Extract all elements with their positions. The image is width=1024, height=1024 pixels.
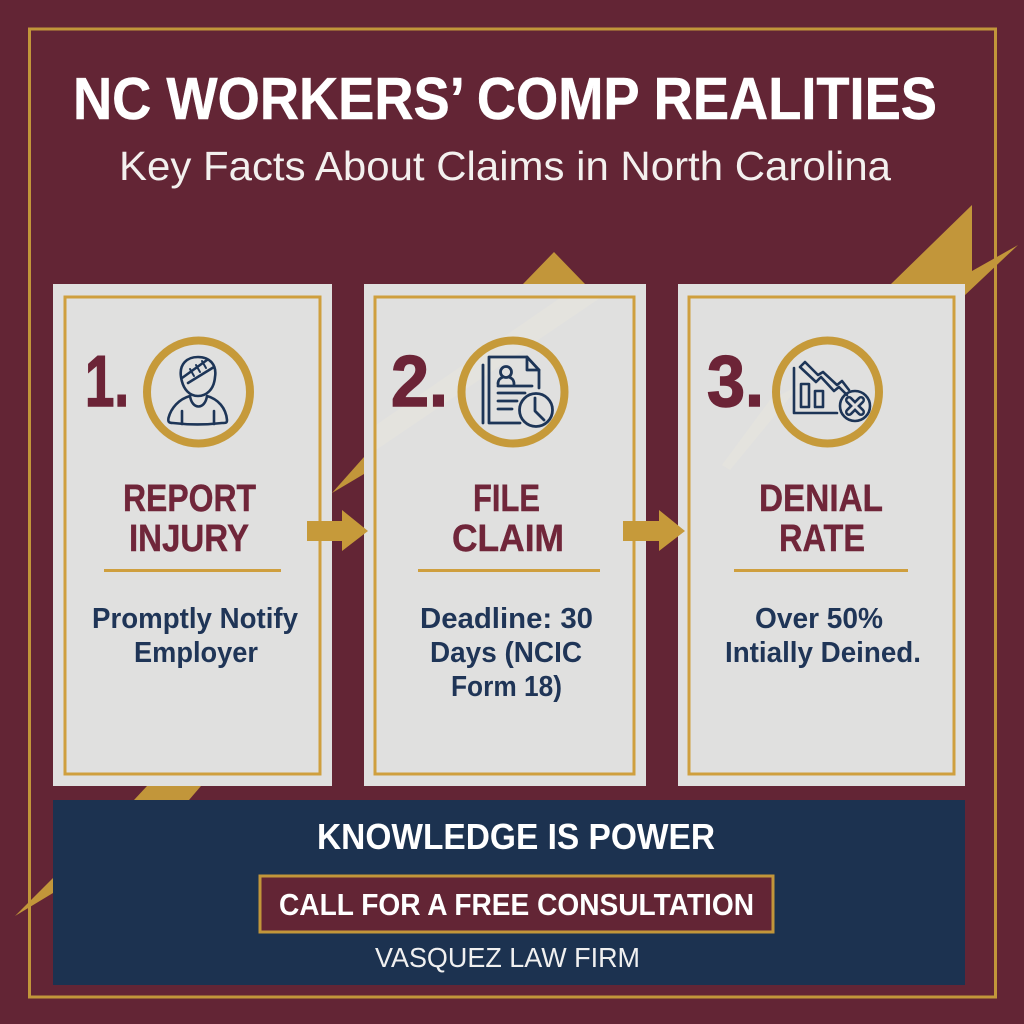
heading: report injury: REPORT	[123, 478, 256, 520]
arrow: step 1 to step 2	[307, 510, 368, 551]
body: file claim	[420, 603, 593, 703]
heading: report injury	[123, 478, 256, 560]
heading: denial rate: DENIAL	[759, 478, 883, 520]
gold background accents	[15, 205, 1018, 916]
title: NC WORKERS’ COMP REALITIES	[73, 66, 937, 132]
body: file claim: Days (NCIC	[430, 637, 582, 669]
panel: file claim	[364, 284, 646, 786]
panel: call to action	[53, 800, 965, 985]
panel: report injury	[53, 284, 332, 786]
heading: file claim: FILE	[473, 478, 540, 520]
step number 2: 2.	[391, 342, 448, 422]
body: report injury	[92, 603, 298, 669]
heading: denial rate: RATE	[779, 518, 865, 560]
arrow: step 2 to step 3	[623, 510, 685, 551]
panel: denial rate	[678, 284, 965, 786]
subtitle: Key Facts About Claims in North Carolina	[119, 143, 891, 189]
body: file claim: Deadline: 30	[420, 603, 593, 635]
icon: injured person	[147, 340, 250, 444]
body: report injury: Employer	[134, 637, 258, 669]
heading: file claim: CLAIM	[452, 518, 564, 560]
heading: report injury: INJURY	[129, 518, 249, 560]
body: file claim: Form 18)	[451, 671, 562, 703]
body: denial rate: Over 50%	[755, 603, 883, 635]
button: free consultation	[260, 876, 773, 932]
body: denial rate: Intially Deined.	[725, 637, 921, 669]
heading: knowledge is power: KNOWLEDGE IS POWER	[317, 816, 715, 857]
step number 1: 1.	[85, 342, 129, 422]
step number 3: 3.	[707, 342, 764, 422]
firm name: VASQUEZ LAW FIRM	[375, 942, 640, 973]
body: denial rate	[725, 603, 921, 669]
heading: denial rate	[759, 478, 883, 560]
button: free consultation: CALL FOR A FREE CONSULTATION	[279, 887, 754, 922]
icon: claim document with clock	[462, 340, 564, 444]
heading: file claim	[452, 478, 564, 560]
icon: falling chart with cross	[776, 340, 879, 444]
body: report injury: Promptly Notify	[92, 603, 298, 635]
